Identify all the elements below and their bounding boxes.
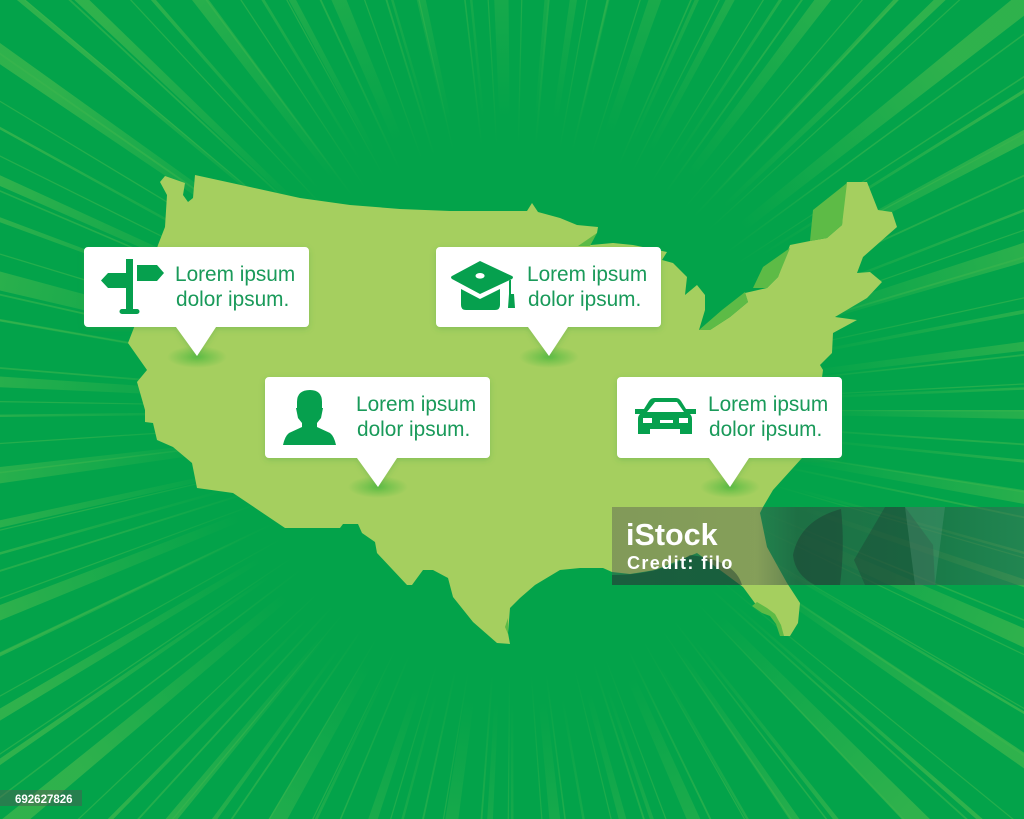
text: dolor ipsum. [709,418,822,441]
pin shadow [348,476,408,498]
text: Lorem ipsum [356,393,476,416]
text: dolor ipsum. [357,418,470,441]
banner shapes [612,507,945,585]
callout: car [617,377,842,498]
icon: graduation cap [451,261,515,310]
banner band [612,507,1024,585]
card [617,377,842,487]
background sunburst rays [162,60,862,760]
image id badge [0,790,82,806]
map: United States [128,175,897,644]
card [265,377,490,487]
pin shadow [167,346,227,368]
text: dolor ipsum. [528,288,641,311]
text: Lorem ipsum [708,393,828,416]
card [436,247,661,356]
pin shadow [519,346,579,368]
callout: signpost [84,247,309,368]
callout: graduation cap [436,247,661,368]
image id badge: 692627826 [15,794,73,806]
callout: person [265,377,490,498]
map extruded shading [505,183,847,636]
pin shadow [700,476,760,498]
text: dolor ipsum. [176,288,289,311]
card [84,247,309,356]
icon: car [635,398,696,434]
text: Lorem ipsum [175,263,295,286]
icon: signpost [101,259,164,314]
text: Lorem ipsum [527,263,647,286]
iStock logo: iStock [626,518,718,552]
watermark banner [612,507,1024,585]
credit: Credit: filo [627,553,734,573]
map land [128,175,897,644]
icon: person [283,390,336,445]
